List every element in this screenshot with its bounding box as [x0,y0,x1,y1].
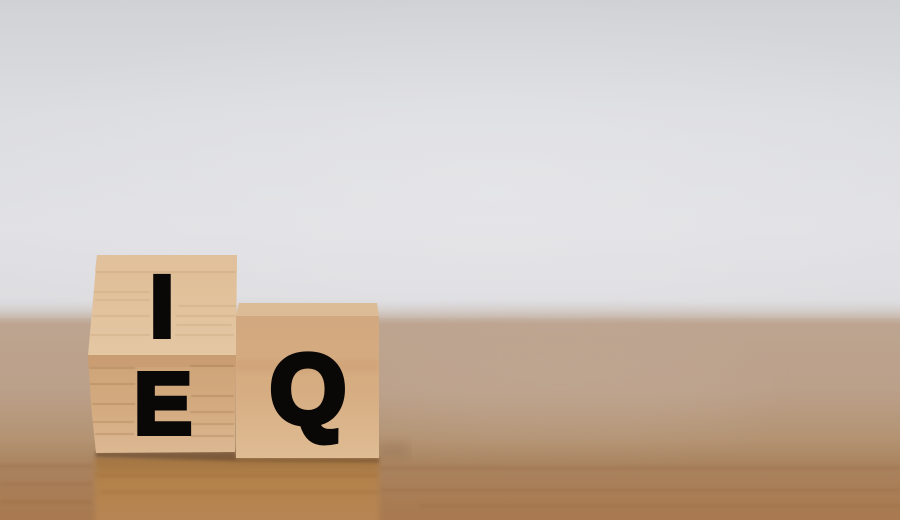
upper face with letter I [88,255,237,356]
background wall [0,0,900,325]
shadow under blocks [95,451,379,462]
Q cube front face [236,316,379,458]
letter Q: Q [270,334,346,444]
right cube with letter Q [236,303,379,458]
lower face with letter E [88,355,236,453]
wall glow [0,0,900,325]
flip block: IQ / EQ left cube [88,255,237,453]
letter E: E [134,356,192,452]
grain band [237,360,378,372]
soft cast shadow right of Q block [379,442,409,458]
Q cube top face [236,303,379,316]
block reflection on table [95,458,379,520]
wooden table [0,296,900,520]
letter I: I [150,258,174,356]
